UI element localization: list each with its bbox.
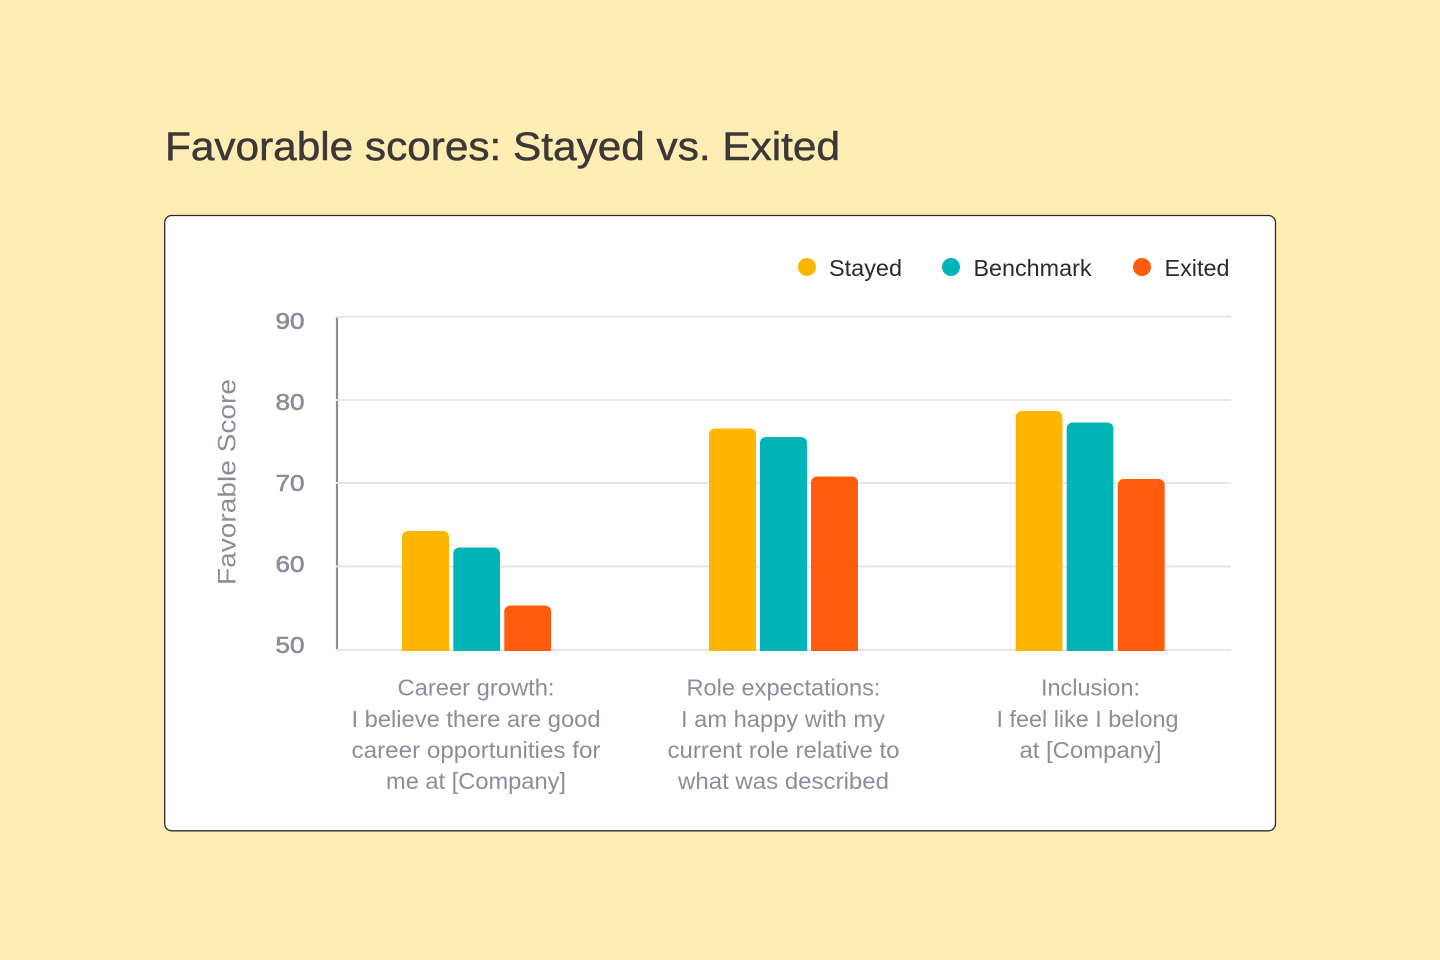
category label: career growth: I believe there are good bbox=[352, 706, 600, 732]
y axis labels: 70 bbox=[276, 470, 304, 496]
category label: role expectations: I am happy with my bbox=[681, 706, 886, 732]
y axis labels: 50 bbox=[276, 632, 304, 658]
legend bbox=[798, 255, 1230, 281]
legend: Stayed bbox=[829, 255, 902, 281]
category label: career growth: career opportunities for bbox=[352, 737, 601, 763]
category label: inclusion bbox=[996, 674, 1178, 763]
category label: career growth: me at [Company] bbox=[386, 768, 566, 794]
grid lines and axis bbox=[336, 317, 1231, 650]
category label: role expectations bbox=[668, 674, 900, 794]
legend: Exited bbox=[1164, 255, 1230, 281]
bars: inclusion bbox=[1016, 411, 1165, 651]
panel: chart card bbox=[165, 216, 1276, 831]
bars: career growth bbox=[402, 531, 551, 651]
category label: career growth: Career growth: bbox=[398, 674, 554, 700]
y axis labels: 60 bbox=[276, 551, 304, 577]
y axis title: Favorable Score bbox=[214, 379, 242, 585]
category label: career growth bbox=[352, 674, 601, 794]
bars: role expectations bbox=[709, 428, 858, 651]
y axis labels: 90 bbox=[276, 308, 304, 334]
category label: inclusion: I feel like I belong bbox=[996, 706, 1178, 732]
title: Favorable scores: Stayed vs. Exited bbox=[165, 125, 840, 169]
category label: inclusion: at [Company] bbox=[1020, 737, 1162, 763]
y axis labels bbox=[276, 308, 304, 658]
y axis labels: 80 bbox=[276, 389, 304, 415]
category label: role expectations: current role relative to bbox=[668, 737, 900, 763]
category label: inclusion: Inclusion: bbox=[1041, 674, 1140, 700]
category label: role expectations: what was described bbox=[677, 768, 889, 794]
category label: role expectations: Role expectations: bbox=[686, 674, 880, 700]
legend: Benchmark bbox=[974, 255, 1092, 281]
